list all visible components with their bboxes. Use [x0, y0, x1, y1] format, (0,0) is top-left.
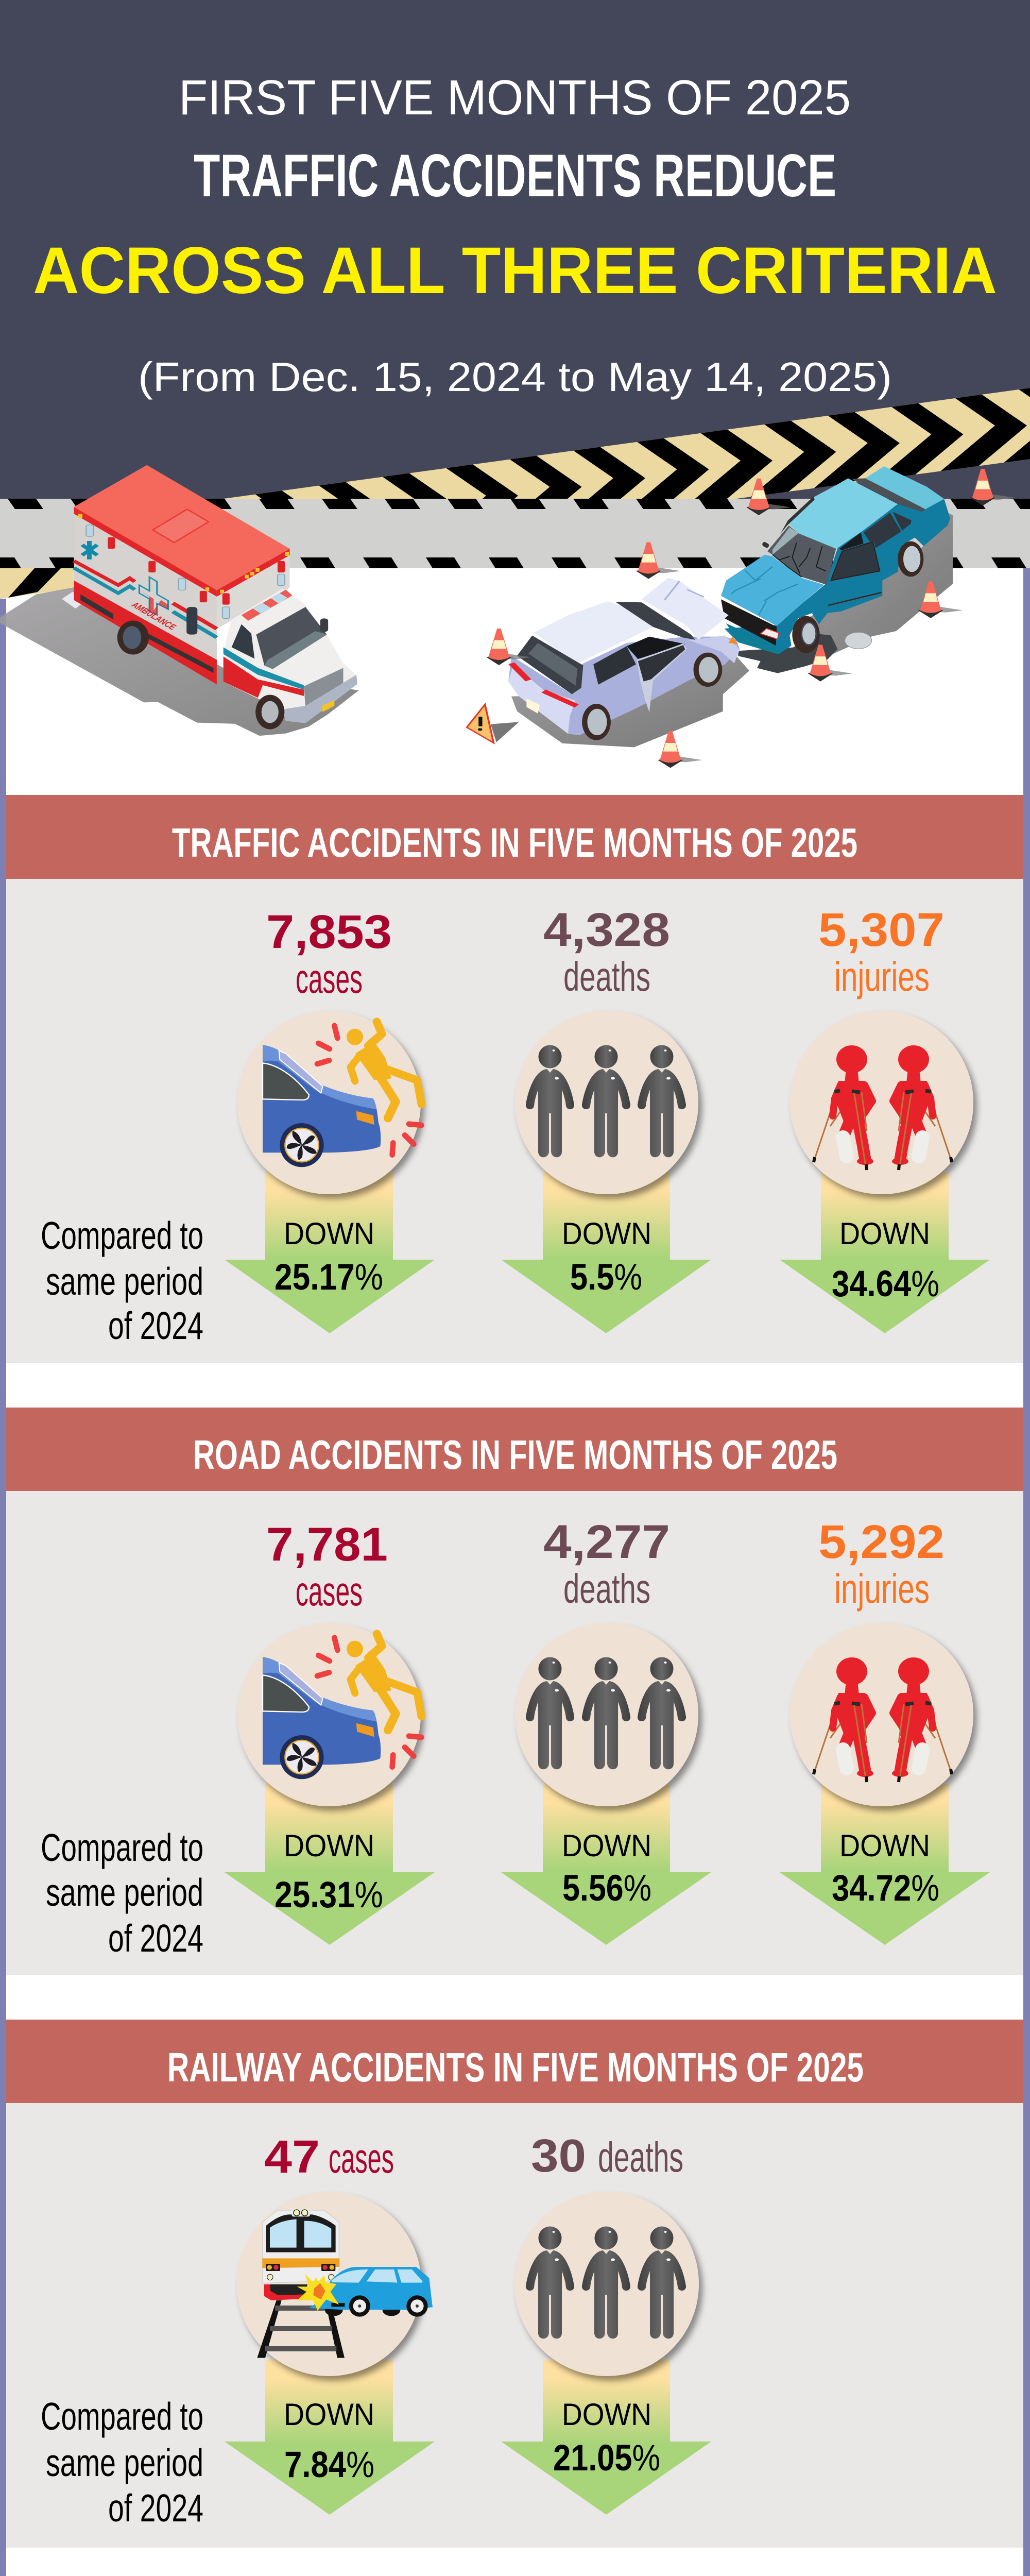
stat: deaths — [543, 1516, 670, 1612]
stat: injuries: 5,307 — [818, 904, 945, 956]
label: comparison note: same period — [46, 1871, 203, 1914]
lower-left tape fragment — [0, 568, 74, 599]
stat: deaths: deaths — [563, 954, 650, 999]
stat: deaths: 4,328 — [543, 904, 670, 956]
label: comparison note — [41, 1214, 203, 1347]
change: cases — [274, 1216, 383, 1298]
change: cases: 7.84% — [284, 2445, 374, 2485]
arrow: deaths down — [501, 1172, 711, 1333]
stat: injuries — [818, 904, 945, 999]
change: injuries: 34.72% — [832, 1868, 939, 1909]
icon: three people — [515, 1011, 698, 1194]
label: comparison note: Compared to — [41, 1214, 203, 1257]
title: period line: FIRST FIVE MONTHS OF 2025 — [179, 70, 851, 125]
icon: car hitting pedestrian — [237, 1011, 421, 1194]
road band — [0, 499, 1030, 568]
stat: deaths: deaths — [563, 1566, 650, 1612]
label: comparison note: same period — [46, 2441, 203, 2484]
change: injuries: DOWN — [839, 1828, 930, 1863]
stat: cases: cases — [296, 956, 363, 1002]
stat: injuries — [818, 1516, 945, 1612]
arrow: deaths down — [501, 1784, 711, 1945]
change: deaths — [553, 2397, 660, 2479]
illustration: ambulance: AMBULANCE — [129, 600, 179, 632]
subtitle: date range: (From Dec. 15, 2024 to May 14, 2025) — [138, 354, 892, 400]
arrow: cases down — [225, 1172, 435, 1333]
change: cases: DOWN — [284, 1828, 374, 1863]
stat: cases: cases — [296, 1568, 363, 1614]
title: highlighted line: ACROSS ALL THREE CRITERIA — [33, 234, 997, 308]
arrow: injuries down — [780, 1172, 990, 1333]
illustration: blue crashed car — [721, 466, 953, 673]
change: cases: 25.17% — [274, 1257, 383, 1298]
stat: cases: 47 — [264, 2131, 320, 2183]
chevron tape — [224, 388, 1030, 499]
stat: cases — [264, 2131, 394, 2183]
label: comparison note — [41, 2395, 203, 2530]
change: cases: DOWN — [284, 2397, 374, 2432]
stat: cases — [266, 906, 392, 1002]
banner: railway accidents — [6, 2020, 1023, 2103]
side frame lines — [0, 568, 1030, 2576]
label: comparison note: of 2024 — [108, 2486, 203, 2530]
icon: injured figures on crutches — [790, 1011, 973, 1194]
icon: three people — [514, 2192, 699, 2376]
change: cases: 25.31% — [274, 1875, 383, 1916]
illustration: warning triangle — [467, 704, 519, 743]
change: deaths: 5.5% — [570, 1257, 642, 1298]
stat: cases: 7,781 — [266, 1518, 388, 1571]
label: comparison note: of 2024 — [108, 1304, 203, 1347]
change: cases — [284, 2397, 374, 2485]
arrow: injuries down — [780, 1784, 990, 1945]
change: injuries — [832, 1216, 939, 1304]
change: deaths — [562, 1828, 651, 1909]
change: deaths — [562, 1216, 651, 1298]
icon: car hitting pedestrian — [237, 1623, 421, 1806]
change: deaths: 21.05% — [553, 2438, 660, 2479]
change: injuries: 34.64% — [832, 1264, 939, 1304]
stat: injuries: injuries — [834, 1566, 930, 1612]
panel: railway accidents — [6, 2020, 1023, 2548]
illustration: traffic cones — [487, 469, 1015, 768]
change: injuries — [832, 1828, 939, 1909]
stat: cases — [266, 1518, 388, 1614]
stat: deaths: 4,277 — [543, 1516, 670, 1568]
label: comparison note: same period — [46, 1260, 203, 1303]
change: cases — [274, 1828, 383, 1916]
change: deaths: DOWN — [562, 2397, 651, 2432]
banner: road accidents — [6, 1408, 1023, 1491]
label: comparison note: of 2024 — [108, 1917, 203, 1960]
stat: injuries: injuries — [834, 954, 930, 999]
stat: deaths: deaths — [598, 2134, 683, 2181]
arrow: deaths down — [501, 2360, 711, 2515]
change: injuries: DOWN — [839, 1216, 930, 1251]
label: comparison note: Compared to — [41, 1826, 203, 1869]
change: deaths: DOWN — [562, 1828, 651, 1863]
stat: deaths: 30 — [531, 2130, 586, 2182]
header panel — [0, 0, 1030, 499]
arrow: cases down — [225, 1784, 435, 1945]
stat: cases: 7,853 — [266, 906, 392, 958]
illustration: ambulance — [0, 465, 358, 736]
stat: injuries: 5,292 — [818, 1516, 945, 1568]
icon: three people — [515, 1623, 698, 1806]
label: comparison note: Compared to — [41, 2395, 203, 2438]
icon: train hitting car — [237, 2192, 433, 2376]
change: deaths: DOWN — [562, 1216, 651, 1251]
change: cases: DOWN — [284, 1216, 374, 1251]
stat: deaths — [543, 904, 670, 999]
arrow: cases down — [225, 2360, 435, 2515]
change: deaths: 5.56% — [562, 1868, 651, 1909]
banner: traffic accidents — [6, 795, 1023, 879]
icon: injured figures on crutches — [790, 1623, 973, 1806]
panel: traffic accidents — [6, 795, 1023, 1363]
stat: deaths — [531, 2130, 683, 2182]
panel: road accidents — [6, 1408, 1023, 1975]
stat: cases: cases — [329, 2135, 394, 2182]
illustration: white crashed car — [508, 578, 749, 747]
label: comparison note — [41, 1826, 203, 1960]
